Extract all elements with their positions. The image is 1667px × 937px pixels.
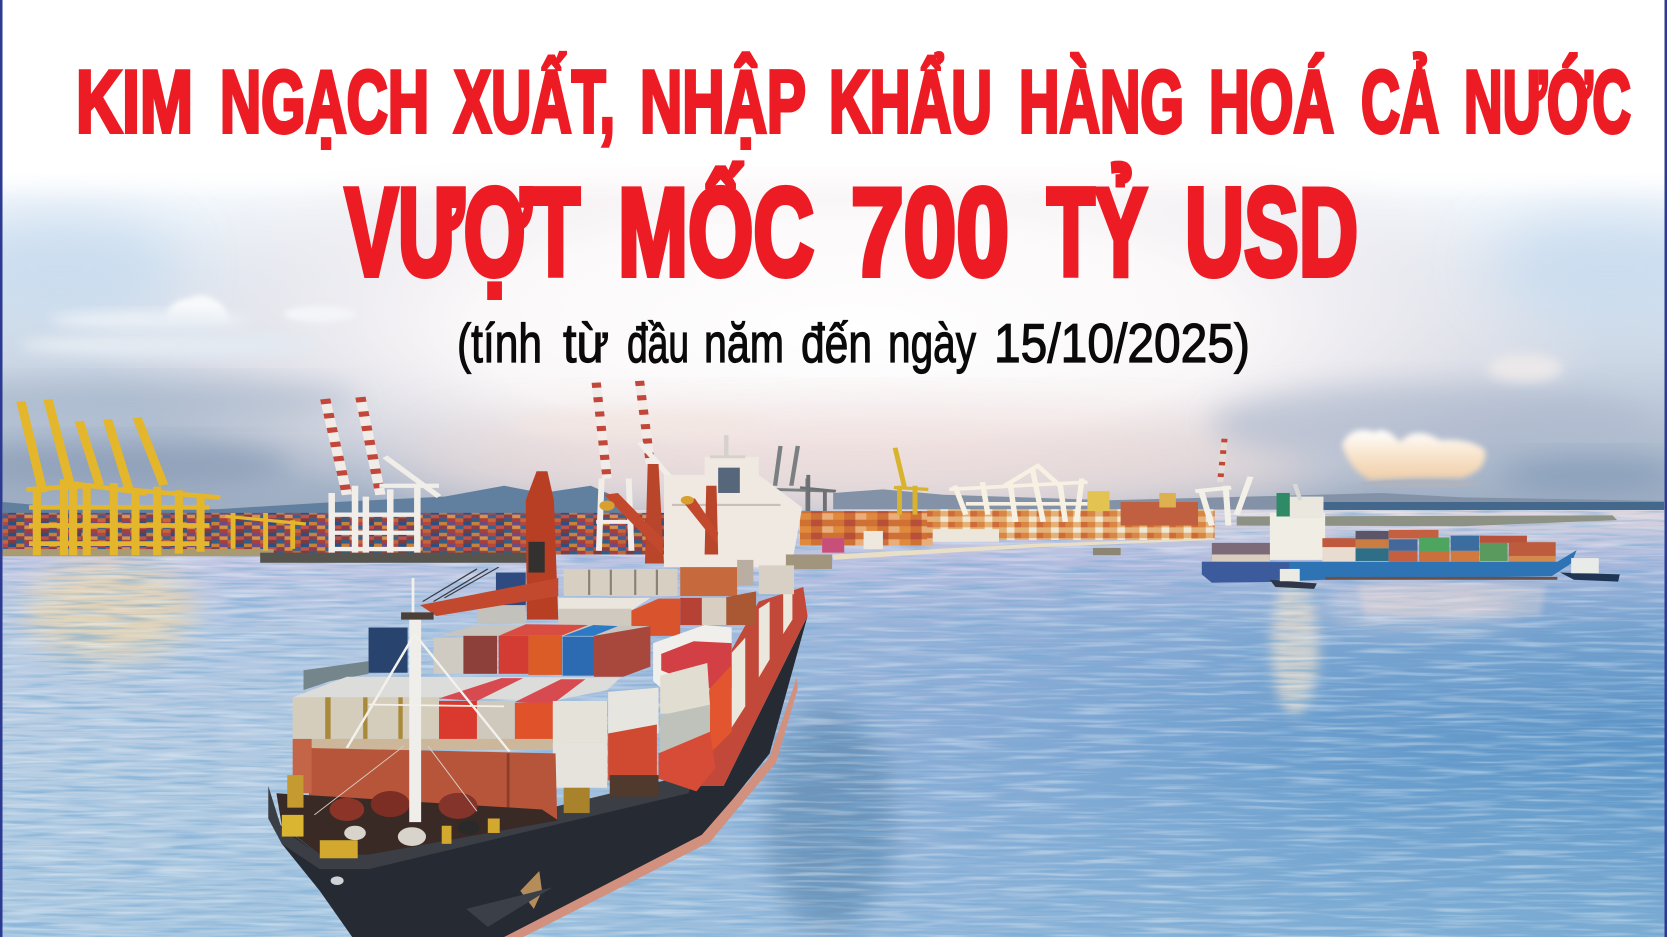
- title line 1: KHẨU: [829, 52, 992, 151]
- white and red cranes: [325, 381, 678, 553]
- title line 1: HOÁ: [1209, 52, 1334, 151]
- mast and stays: [314, 578, 509, 822]
- background sky: [0, 0, 1667, 550]
- bow details: [331, 871, 553, 927]
- title line 2: 700: [851, 164, 1009, 302]
- far shoreline and second ship: [800, 439, 1664, 616]
- title line 1: NGẠCH: [220, 52, 429, 151]
- yellow cranes: [22, 403, 304, 553]
- deck machinery: [276, 775, 659, 858]
- pink boot stripe: [504, 677, 798, 937]
- title line 1: CẢ: [1361, 52, 1439, 151]
- subtitle date range: (tính: [457, 312, 542, 374]
- title line 2: TỶ: [1047, 163, 1147, 302]
- red deck cranes: [420, 464, 718, 620]
- subtitle date range: năm: [704, 312, 784, 374]
- title line 1: XUẤT,: [454, 52, 615, 151]
- distant cranes: [770, 446, 835, 511]
- deck cargo: [1212, 530, 1556, 562]
- title line 2: [345, 163, 1358, 302]
- container stacks third row: [304, 624, 732, 753]
- subtitle date range: đầu: [627, 312, 689, 374]
- reflections: [1358, 584, 1546, 616]
- mountains: [3, 486, 623, 522]
- title line 2: VƯỢT: [345, 164, 580, 302]
- quay: [3, 549, 542, 563]
- title line 1: NHẬP: [640, 52, 806, 151]
- sea: [0, 510, 1667, 937]
- main container ship: [268, 435, 832, 937]
- far mountains: [833, 489, 1664, 509]
- clouds: [0, 295, 1667, 495]
- foredeck bulwark: [268, 779, 691, 869]
- container stacks front rows: [293, 663, 715, 791]
- tug boats: [1270, 558, 1620, 589]
- title line 2: USD: [1185, 164, 1358, 302]
- container yard: [3, 513, 680, 554]
- far cranes and terminal: [800, 439, 1251, 526]
- title line 2: MỐC: [618, 163, 814, 302]
- title line 1: KIM: [76, 52, 193, 151]
- right blue edge: [1664, 0, 1667, 937]
- subtitle date range: đến: [801, 312, 872, 374]
- left blue edge: [0, 0, 2, 937]
- superstructure: [664, 435, 832, 569]
- hull: [1202, 550, 1577, 583]
- far shore strip: [1320, 502, 1664, 510]
- shore containers: [800, 491, 1215, 569]
- subtitle date range: 15/10/2025): [994, 312, 1250, 374]
- title line 1: HÀNG: [1019, 52, 1184, 151]
- container stacks back rows: [477, 560, 794, 636]
- bridge tower: [1270, 484, 1325, 560]
- left port with cranes: [3, 381, 835, 563]
- side container rows: [688, 587, 808, 786]
- second ship: [1202, 484, 1620, 589]
- subtitle date range: ngày: [888, 312, 976, 374]
- title line 1: [76, 52, 1631, 151]
- subtitle date range: [457, 312, 1250, 374]
- hull: [268, 616, 808, 937]
- green spit: [1237, 515, 1617, 526]
- subtitle date range: từ: [563, 312, 609, 374]
- forecastle wall: [293, 739, 557, 820]
